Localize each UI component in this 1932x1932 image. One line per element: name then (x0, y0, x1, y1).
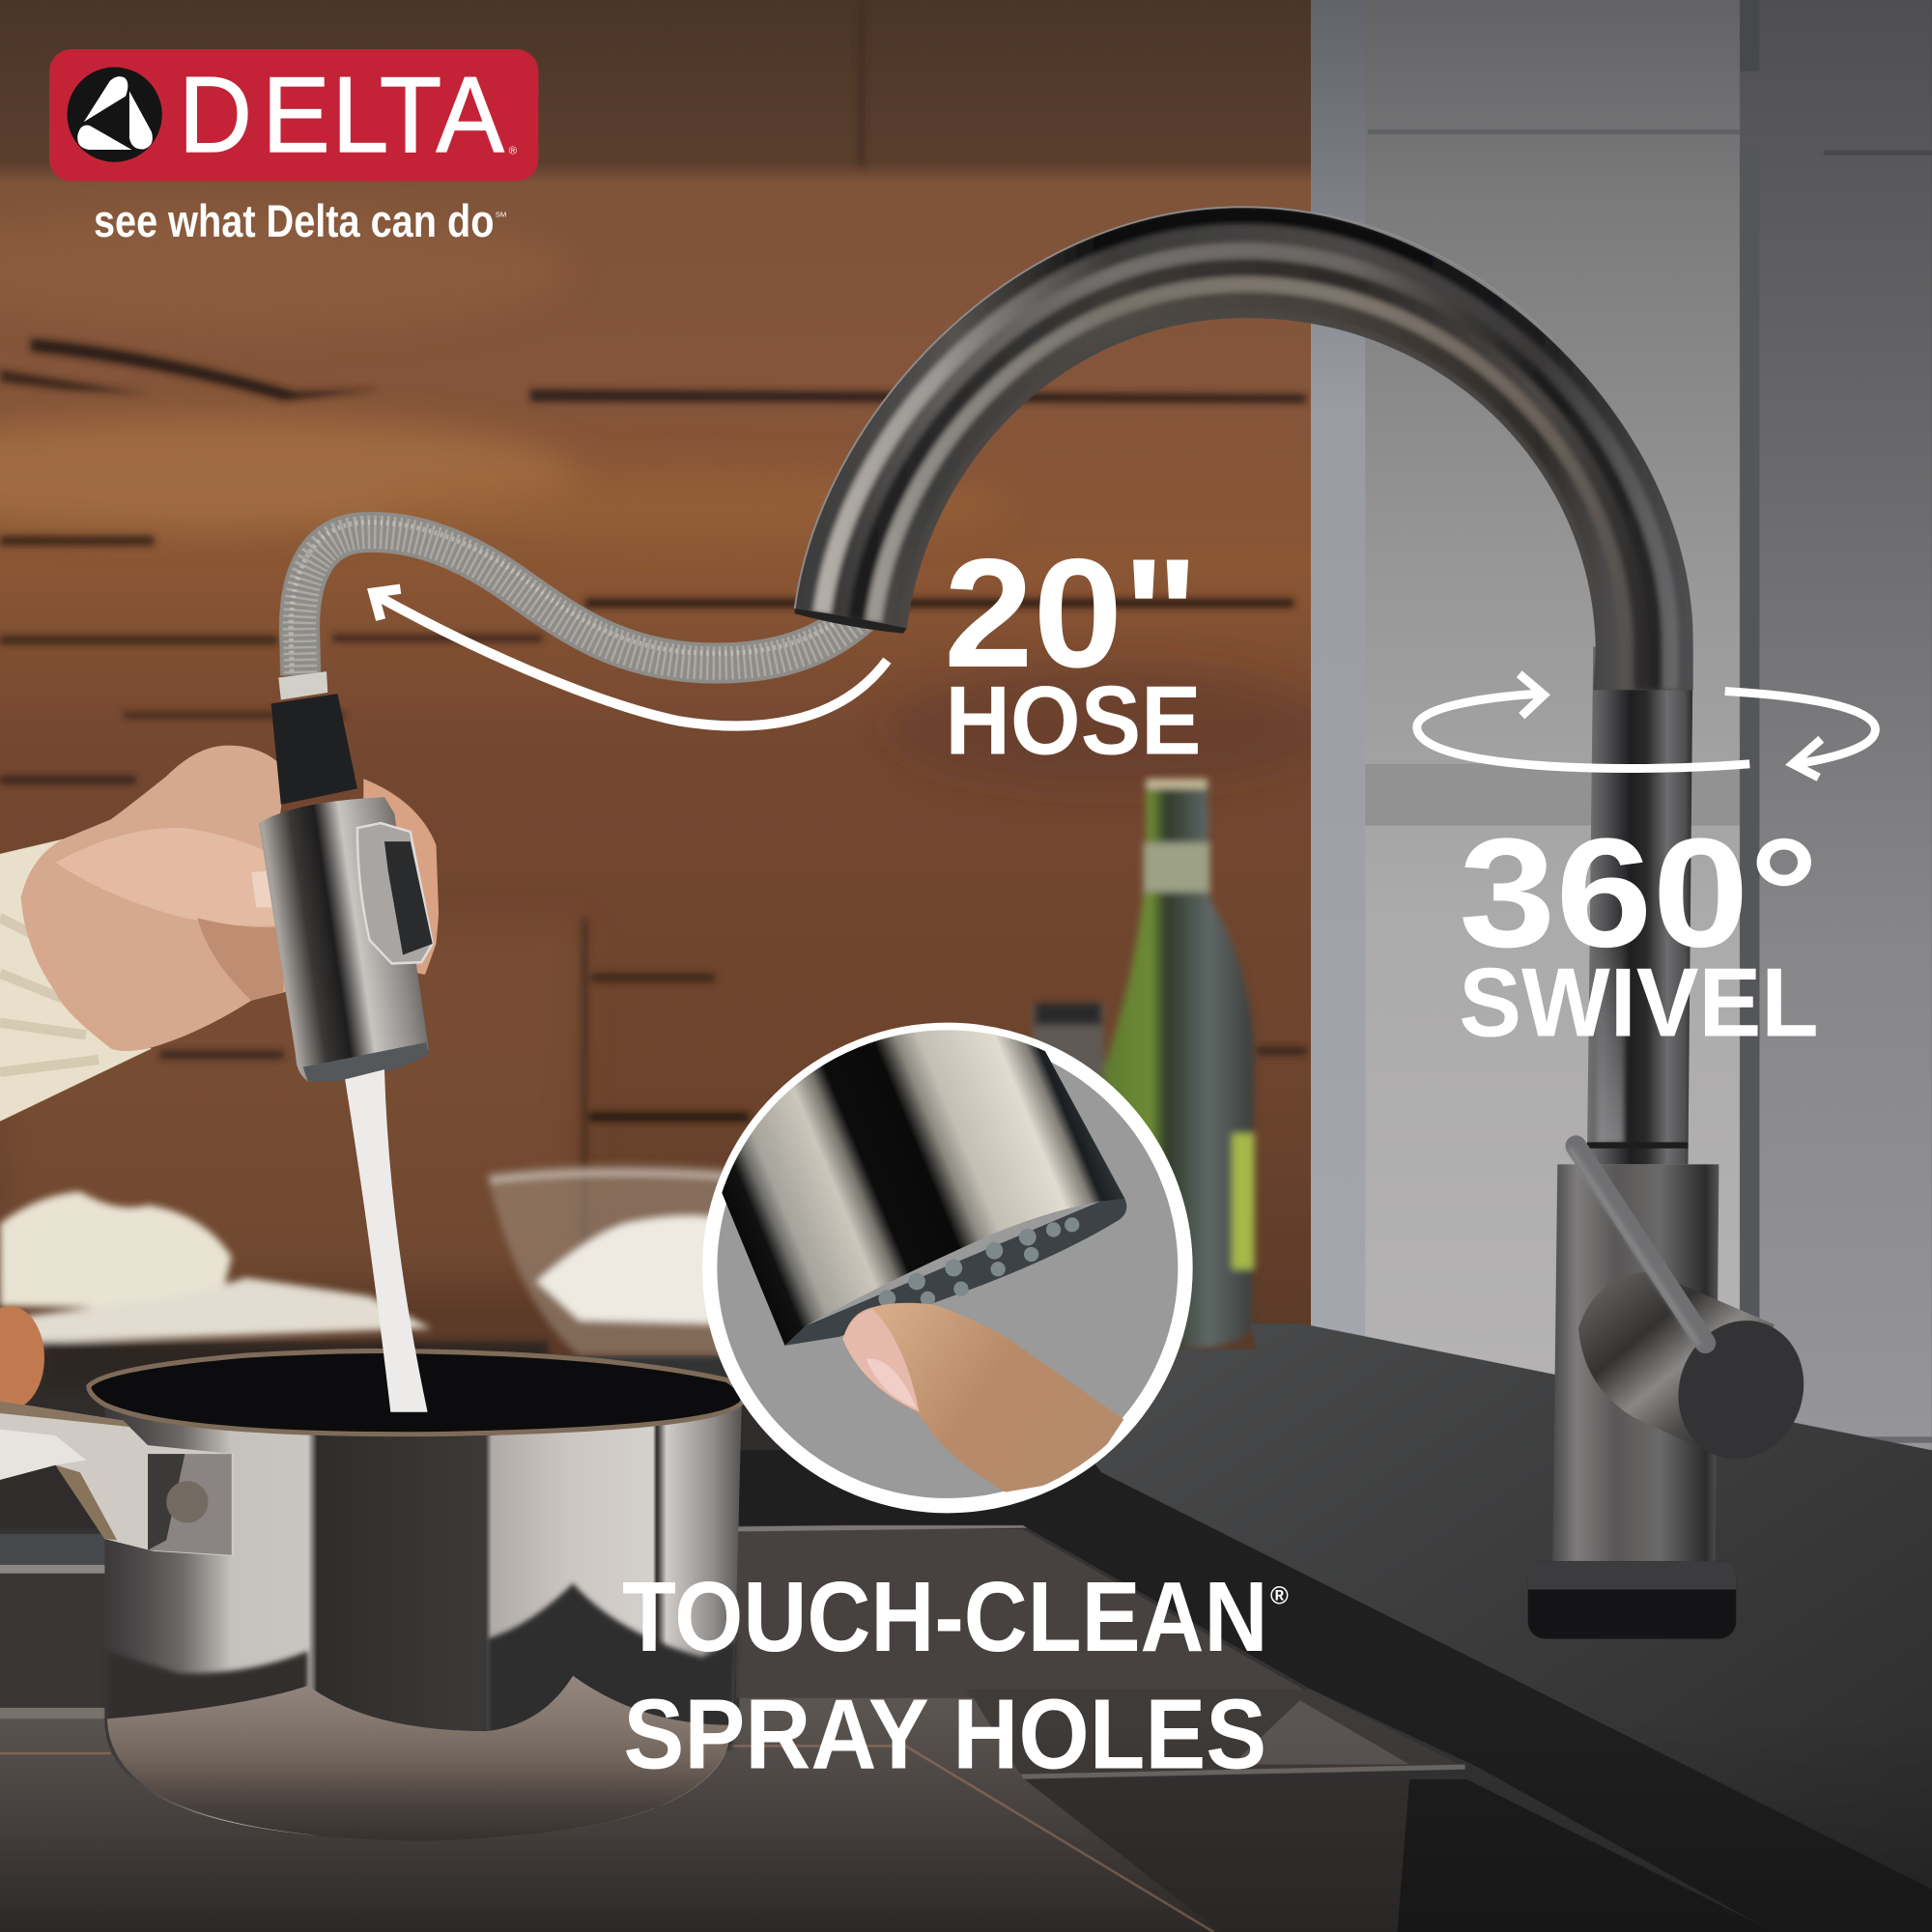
faucet handle (1570, 1146, 1823, 1477)
20 inch hose label: 20" (944, 527, 1199, 700)
tagline: SM (496, 210, 506, 218)
360 degree swivel label: SWIVEL (1459, 950, 1819, 1058)
water stream (345, 1069, 428, 1412)
wine bottle and jar (1033, 779, 1254, 1350)
dough, flour bowl and egg (0, 1164, 727, 1409)
20 inch hose label (944, 527, 1202, 776)
touch-clean spray holes label (622, 1560, 1289, 1789)
wood wall background (0, 0, 1331, 1355)
cooking pot (0, 1351, 743, 1841)
arrow: hose extension (373, 589, 887, 725)
spray nozzle close-up (722, 1030, 1126, 1346)
arrow: 360 degree swivel (1417, 674, 1875, 778)
hand and sweater (0, 746, 439, 1122)
registered mark: ® (509, 145, 518, 156)
braided hose (291, 523, 863, 675)
touch-clean spray holes label: SPRAY HOLES (623, 1677, 1266, 1789)
tagline: see what Delta can do (94, 196, 494, 247)
20 inch hose label: HOSE (945, 668, 1202, 776)
Delta logo (49, 49, 538, 181)
pull-down spray head (259, 671, 433, 1082)
callout circle: touch-clean spray holes detail (702, 1022, 1193, 1513)
faucet body and base (1528, 1142, 1736, 1638)
faucet spout arch (795, 207, 1693, 690)
360 degree swivel label: 360° (1459, 808, 1819, 980)
touch-clean spray holes label: TOUCH-CLEAN (622, 1560, 1267, 1672)
faucet riser (1587, 647, 1693, 1164)
bottom shading (0, 1725, 1932, 1932)
spout outlet rim (795, 609, 907, 634)
countertop (0, 1323, 1932, 1889)
finger pressing nozzle (842, 1303, 1123, 1492)
360 degree swivel label (1459, 808, 1819, 1058)
sink basin (0, 1450, 1932, 1932)
cabinet doors (1311, 0, 1932, 1454)
icon: Delta triangle mark (68, 68, 162, 162)
touch-clean spray holes label: ® (1270, 1583, 1289, 1610)
wordmark: DELTA (179, 54, 504, 174)
